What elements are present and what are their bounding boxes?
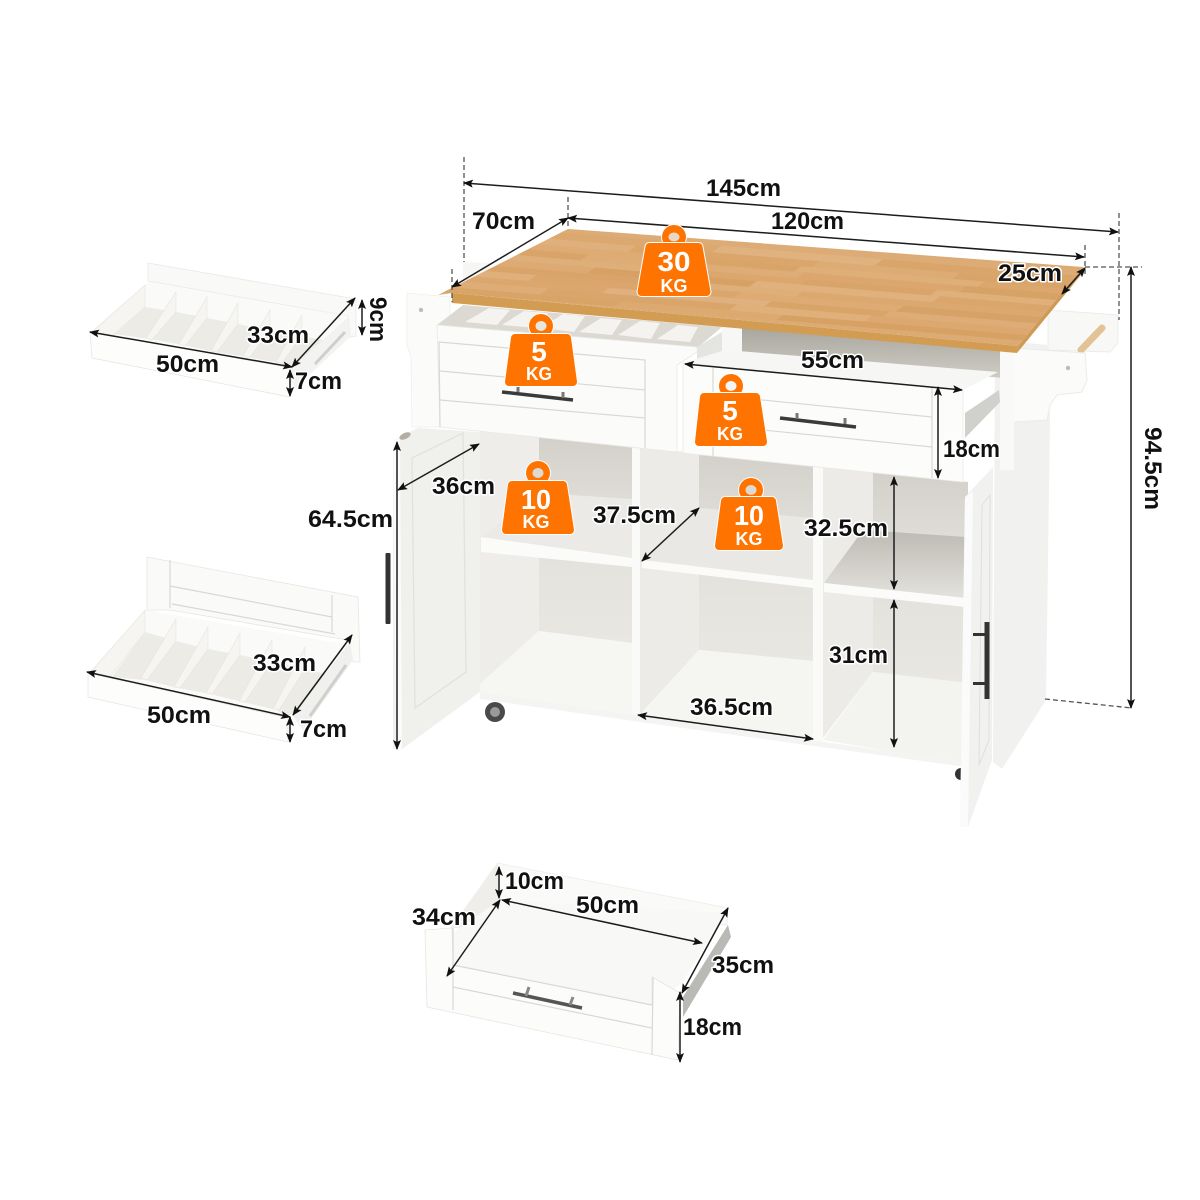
dimension labels: main cabinet: 64.5cm [308,506,393,533]
left caster wheel [485,702,505,722]
front towel rack bracket [1013,348,1087,422]
vertical dividers [632,446,640,722]
slide rail [683,925,731,1017]
tray slide rail [697,332,722,367]
weight badge: 10 KG middle shelf: KG [736,529,762,549]
left bracket screw [419,308,423,312]
right compartment [823,466,968,764]
slide rail [293,642,353,730]
back towel rack bracket [1048,310,1118,352]
front strip [90,332,292,397]
cell floors [114,307,333,368]
weight badge: 10 KG left shelf: 10 [521,484,551,515]
dashed reference lines [452,157,1142,708]
tray interior [88,610,350,718]
left wall [90,610,145,677]
dimension labels: main cabinet [308,175,1166,721]
cabinet interior [480,430,968,767]
right drawer handle [780,413,856,427]
left door handle [386,553,390,624]
bottom front edge [480,692,966,767]
removable organizer tray drawer (top) [90,263,356,397]
wooden towel bar [1081,328,1102,350]
dimension labels: main cabinet: 32.5cm [804,515,888,542]
weight badge: 5 KG right drawer: 5 [722,395,738,426]
left open door [386,428,480,749]
weight badge: 10 KG left shelf [506,460,570,532]
middle compartment [640,448,813,740]
dimension labels: main cabinet: 18cm [943,436,1000,463]
dimension labels: deep drawer: 34cm [412,904,476,931]
weight badge: 10 KG left shelf: KG [522,512,550,532]
left drawer handle [502,386,573,400]
cell floors [112,632,335,718]
slide rail [292,317,350,390]
floor [453,900,727,1005]
rail slot [315,332,345,364]
dimension labels: deep drawer: 50cm [576,892,639,919]
main kitchen island cabinet [386,221,1139,827]
right open door [960,467,993,827]
dimension labels: main cabinet: 70cm [472,208,535,235]
weight badge: 30 KG: KG [660,276,688,296]
right side panel [993,340,1050,769]
left compartment [480,430,632,718]
back wall and rim [497,863,728,925]
top opening behind the right drawer [725,326,1003,378]
back rim [148,263,356,337]
weight badge: 5 KG right drawer [699,373,763,444]
dimension labels: main cabinet: 36cm [432,473,495,500]
dimension labels: deep drawer: 35cm [712,952,774,979]
left drawer front [437,325,697,452]
removable organizer tray with drawer front (middle) [88,557,360,742]
open organizer tray in left drawer [437,305,722,367]
dimension labels: middle tray: 50cm [147,702,211,729]
dimension labels: middle tray: 7cm [300,716,347,743]
left wall [92,285,145,336]
drawer front panel [147,557,360,662]
dimension labels: main cabinet: 55cm [801,347,864,374]
tray dividers [141,619,305,710]
door hinge [398,431,412,441]
weight badge: 5 KG left drawer: 5 [531,336,547,367]
front strip [88,673,288,742]
dimension labels: top tray: 9cm [364,297,391,342]
drawer handle [513,987,582,1008]
weight badge: 5 KG left drawer: KG [526,364,552,384]
dimension labels: main cabinet: 145cm [706,175,781,202]
wooden table top [438,229,1084,353]
dimension labels: main cabinet: 37.5cm [593,502,676,529]
dimension labels: middle tray: 33cm [253,650,316,677]
pulled-out right drawer [683,350,998,482]
left wall [450,863,500,928]
centre post between drawers [722,325,742,352]
tray dividers [146,292,302,363]
left end frame [407,293,450,427]
dimension labels: deep drawer: 10cm [505,868,564,895]
dimension labels: main cabinet: 120cm [771,208,844,235]
dimension labels: deep drawer [412,868,774,1041]
weight badge: 30 KG: 30 [658,246,690,277]
dimension labels: top tray: 50cm [156,351,219,378]
dimension labels: top tray: 33cm [247,322,309,349]
rail slot [310,665,346,716]
dimension labels: main cabinet: 36.5cm [690,694,773,721]
tray interior [90,282,348,368]
weight badge: 30 KG [642,224,706,296]
right caster wheel [955,768,967,780]
dimension arrows [87,183,1131,1062]
dimension labels: middle tray [147,650,347,743]
weight badge: 5 KG left drawer [509,313,573,384]
dimension labels: deep drawer: 18cm [683,1014,742,1041]
removable deep drawer (bottom) [425,863,731,1060]
bracket screw [1066,366,1070,370]
right drawer slide rail [965,390,1000,438]
weight badge: 10 KG middle shelf: 10 [734,500,764,531]
dimension labels: main cabinet: 31cm [829,642,888,669]
dimension labels: main cabinet: 25cm [998,260,1062,287]
right door handle [973,622,990,699]
drawer front [425,928,680,1060]
weight badge: 10 KG middle shelf [719,477,779,549]
rear-left top bracket [463,262,490,292]
dimension labels: main cabinet: 94.5cm [1139,427,1166,510]
dimension labels: top tray: 7cm [295,368,342,395]
dimension labels: top tray [156,297,391,395]
right post [1000,345,1014,470]
weight badge: 5 KG right drawer: KG [717,424,743,444]
